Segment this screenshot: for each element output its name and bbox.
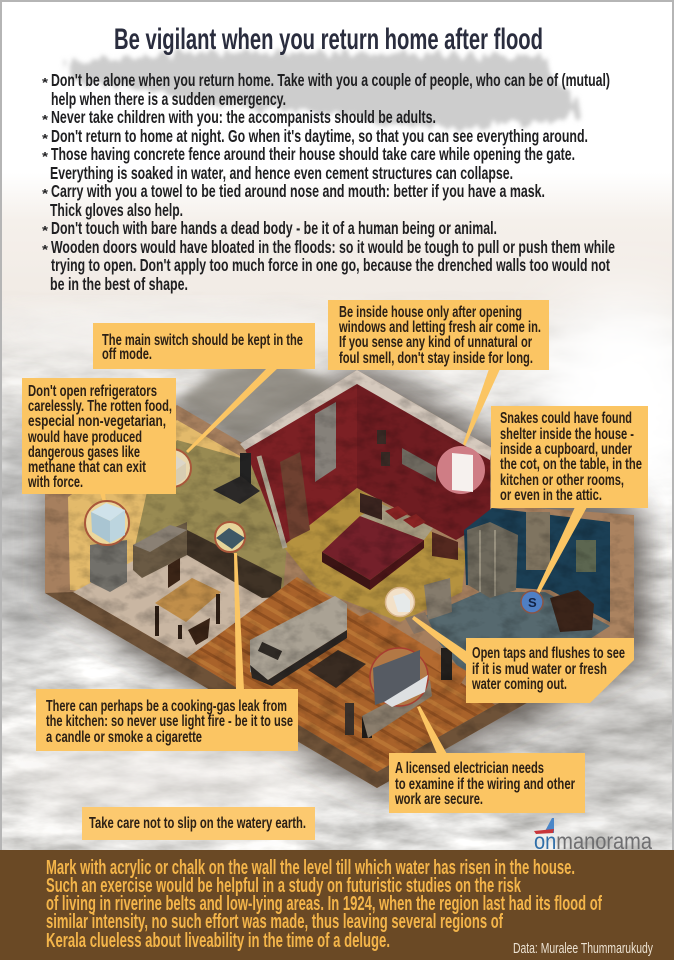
house: wooden living room floor [187, 577, 495, 772]
callout: electrician [389, 753, 585, 813]
callout: cooking gas: There can perhaps be a cooking-gas leak from [46, 698, 287, 715]
footer note text: Kerala clueless about liveability in the time of a deluge. [46, 930, 390, 952]
callout: main switch: off mode. [102, 346, 152, 363]
callout: main switch: The main switch should be kept in the [102, 332, 303, 349]
house: shower cabin [467, 522, 518, 598]
callout: refrigerators: carelessly. The rotten food, [28, 398, 172, 415]
callout: open windows: Be inside house only after opening [339, 304, 522, 321]
logo: onmanorama [534, 818, 652, 854]
callout: main switch [93, 323, 315, 369]
safety tips list: Never take children with you: the accompanists should be adults. [51, 107, 436, 127]
house: TV stand [362, 680, 432, 738]
house: bathroom wall [464, 508, 610, 622]
house: bedroom bed [322, 504, 433, 590]
callout: taps and flushes: if it is mud water or fresh [472, 661, 607, 678]
house: grime texture [40, 365, 640, 795]
callout: refrigerators: with force. [27, 474, 83, 491]
highlight: stove circle [215, 522, 245, 552]
house: kitchen range hood [213, 453, 260, 504]
safety tips list: Don't touch with bare hands a dead body - be it of a human being or animal. [51, 218, 497, 238]
house: kitchen counter left [133, 522, 187, 578]
callout: taps and flushes [466, 638, 634, 703]
house: orange strip along bathroom [357, 612, 468, 685]
callout: cooking gas: the kitchen: so never use light fire - be it to use [46, 713, 293, 730]
callout: cooking gas [36, 689, 298, 751]
house: red bedroom right wall [357, 383, 490, 540]
safety tips list: * [42, 75, 49, 90]
callout: snakes: or even in the attic. [500, 487, 602, 504]
callout: open windows: foul smell, don't stay inside for long. [339, 350, 533, 367]
callout: refrigerators: especial non-vegetarian, [28, 413, 166, 430]
house: grey inner partition [259, 456, 285, 548]
house: red bedroom left wall [245, 383, 357, 546]
safety tips list: help when there is a sudden emergency. [51, 89, 286, 109]
callout: electrician: to examine if the wiring and other [395, 776, 575, 793]
highlight: boiler circle [153, 449, 191, 487]
house: bedroom floor [283, 488, 466, 622]
house: wall paintings [377, 430, 436, 482]
background: grey brush stroke behind the heading [66, 52, 580, 130]
safety tips list: * [42, 112, 49, 127]
house: kitchen counter right [187, 530, 282, 598]
callout: snakes: kitchen or other rooms, [500, 472, 624, 489]
house: bathroom vanity [550, 590, 594, 632]
house: kitchen floor stained olive [133, 440, 287, 592]
callout: snakes [491, 406, 648, 508]
callout: refrigerators: methane that can exit [28, 459, 146, 476]
house: tan curtain panel [526, 512, 550, 570]
house: coffee table [308, 650, 366, 688]
house: toilet tank [405, 612, 432, 634]
house: sofa [250, 596, 347, 686]
house: washing machine [424, 578, 452, 620]
house: bedroom window [315, 402, 336, 482]
house: bedroom mirror frame [280, 452, 310, 540]
safety tips list: Thick gloves also help. [50, 200, 183, 220]
safety tips list: * [42, 131, 49, 146]
house: kitchen tiled floor [73, 552, 290, 658]
highlight: snake circle: S [528, 595, 537, 610]
safety tips list: * [42, 149, 49, 164]
callout: cooking gas: a candle or smoke a cigarette [46, 729, 202, 746]
callout: open windows: If you sense any kind of unnatural or [339, 334, 532, 351]
house: soft shadow around the cutaway [45, 360, 650, 798]
house: lower front slab [45, 592, 634, 788]
safety tips list: be in the best of shape. [50, 274, 188, 294]
logo icon: swoosh [534, 818, 554, 834]
highlight: window circle [437, 446, 485, 494]
callout: watery earth [82, 807, 315, 840]
highlight: TV circle [370, 648, 428, 707]
callout: taps and flushes: water coming out. [471, 676, 567, 693]
house: stained ground behind the kitchen [177, 352, 335, 440]
house: bathroom floor [420, 592, 610, 684]
callout pointers [100, 368, 587, 754]
highlight: refrigerator circle [85, 501, 129, 545]
house: speakers [345, 648, 452, 738]
house: kitchen back wall [68, 420, 262, 600]
safety tips list [42, 70, 615, 294]
house: bedside tables [360, 493, 458, 560]
house: wall top white band [240, 370, 492, 460]
callout: electrician: work are secure. [394, 791, 483, 808]
safety tips list: * [42, 223, 49, 238]
safety tips list: * [42, 242, 49, 257]
house: fridge body [90, 540, 127, 592]
house: outer walls and slab [45, 370, 634, 788]
footer note text [46, 857, 602, 952]
callout: electrician: A licensed electrician needs [395, 760, 544, 777]
callout: open windows [328, 300, 549, 370]
footer band [0, 850, 674, 960]
safety tips list: * [42, 186, 49, 201]
callout: open windows: windows and letting fresh air come in. [338, 319, 541, 336]
highlight: snake circle [521, 591, 543, 613]
callout: refrigerators [22, 378, 176, 494]
house: bathroom mirror [576, 540, 596, 572]
house: right exterior wall [610, 515, 634, 655]
house: dining table [155, 558, 221, 645]
callout: refrigerators: Don't open refrigerators [28, 383, 157, 400]
highlight: toilet circle [386, 588, 414, 616]
house: isometric cutaway illustration [40, 365, 640, 795]
logo wordmark: onmanorama [534, 828, 652, 854]
callout: watery earth: Take care not to slip on the watery earth. [89, 815, 306, 832]
callout: refrigerators: would have produced [27, 429, 142, 446]
callout: refrigerators: dangerous gases like [28, 444, 140, 461]
